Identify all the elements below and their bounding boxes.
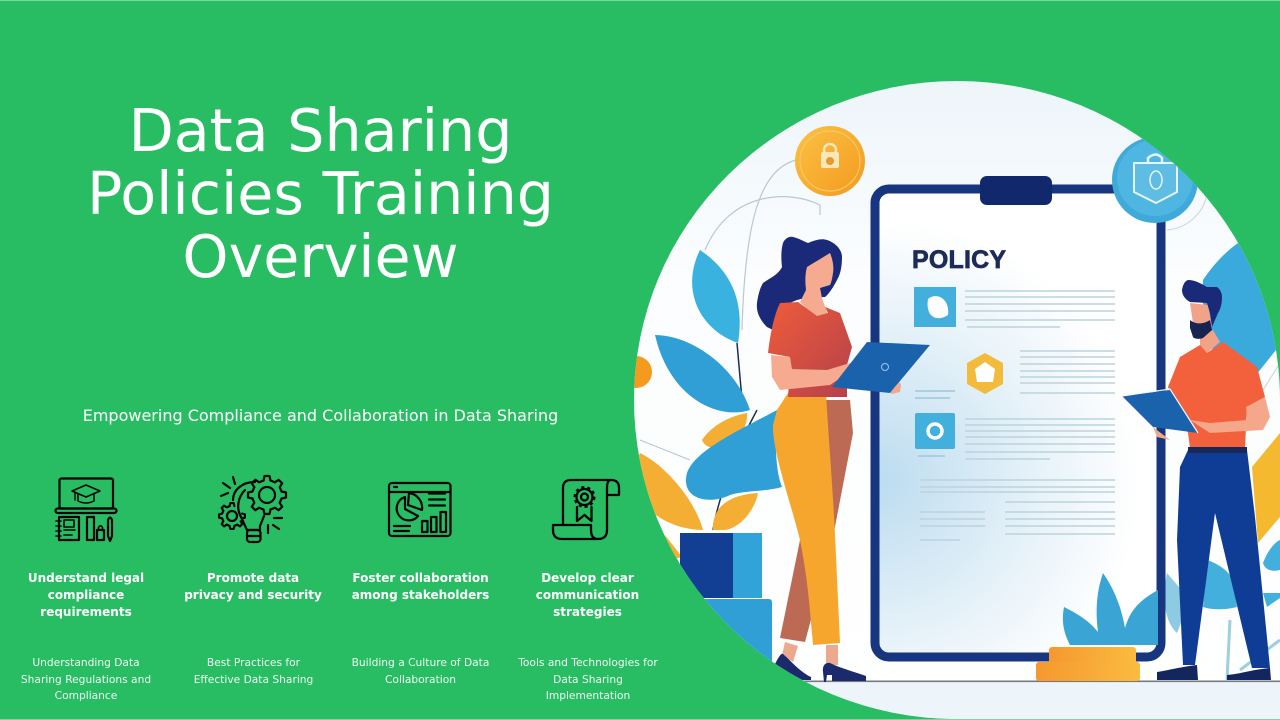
column 3 heading: Foster collaboration (352, 571, 489, 585)
column 2 heading: privacy and security (184, 588, 322, 602)
clip (980, 176, 1052, 205)
subtitle: Empowering Compliance and Collaboration in Data Sharing (83, 406, 558, 425)
background vines (640, 160, 1280, 460)
column 1 description: Compliance (55, 689, 117, 702)
column 1 heading: requirements (40, 605, 132, 619)
floor (803, 680, 1280, 719)
bottom plant (1063, 573, 1158, 645)
column 4 description: Data Sharing (553, 672, 623, 686)
man's tablet (1122, 390, 1198, 433)
column 1 heading (28, 571, 144, 619)
column 3 heading: among stakeholders (352, 588, 489, 602)
column 2 heading: Promote data (207, 571, 299, 585)
column 4 heading: communication (536, 588, 639, 602)
column 4 description: Implementation (546, 689, 630, 702)
column 3 description: Building a Culture of Data (352, 656, 489, 669)
title: Data Sharing (129, 97, 512, 165)
column 3 description (352, 656, 489, 686)
column 4 description (518, 656, 658, 702)
document text lines (915, 291, 1115, 540)
orange lock coin (795, 126, 865, 196)
column 1 description: Sharing Regulations and (21, 672, 151, 686)
column 2 description: Effective Data Sharing (194, 672, 313, 686)
illustration: policy document circle (634, 81, 1280, 719)
woman (757, 237, 930, 682)
orange stand (1036, 647, 1140, 681)
yellow leaf behind man (1252, 433, 1280, 543)
title: Policies Training (87, 160, 554, 228)
column 1 heading: Understand legal (28, 571, 144, 585)
column 4 heading (536, 571, 639, 619)
blue leaf behind man (1202, 243, 1276, 372)
column 2 heading (184, 571, 322, 602)
column 2 description (194, 656, 313, 686)
column 1 heading: compliance (48, 588, 124, 602)
column 1 description (21, 656, 151, 702)
column 1 description: Understanding Data (32, 656, 140, 669)
title: Overview (182, 223, 459, 291)
lower right plants (1164, 540, 1280, 633)
blue shield badge (1112, 137, 1198, 223)
column 4 heading: strategies (553, 605, 622, 619)
plant leaves left (628, 250, 782, 560)
heading POLICY: POLICY (912, 246, 1006, 274)
column 3 description: Collaboration (385, 672, 456, 686)
man (1122, 280, 1271, 680)
column 3 heading (352, 571, 489, 602)
column 4 heading: Develop clear (541, 571, 634, 585)
orange coin left (634, 356, 652, 388)
title (87, 97, 554, 291)
tablet frame (875, 176, 1161, 657)
column 2 description: Best Practices for (207, 656, 300, 669)
document icons (914, 287, 1003, 449)
column 4 description: Tools and Technologies for (518, 656, 658, 669)
plant pot (680, 533, 772, 674)
woman's tablet (832, 342, 930, 393)
